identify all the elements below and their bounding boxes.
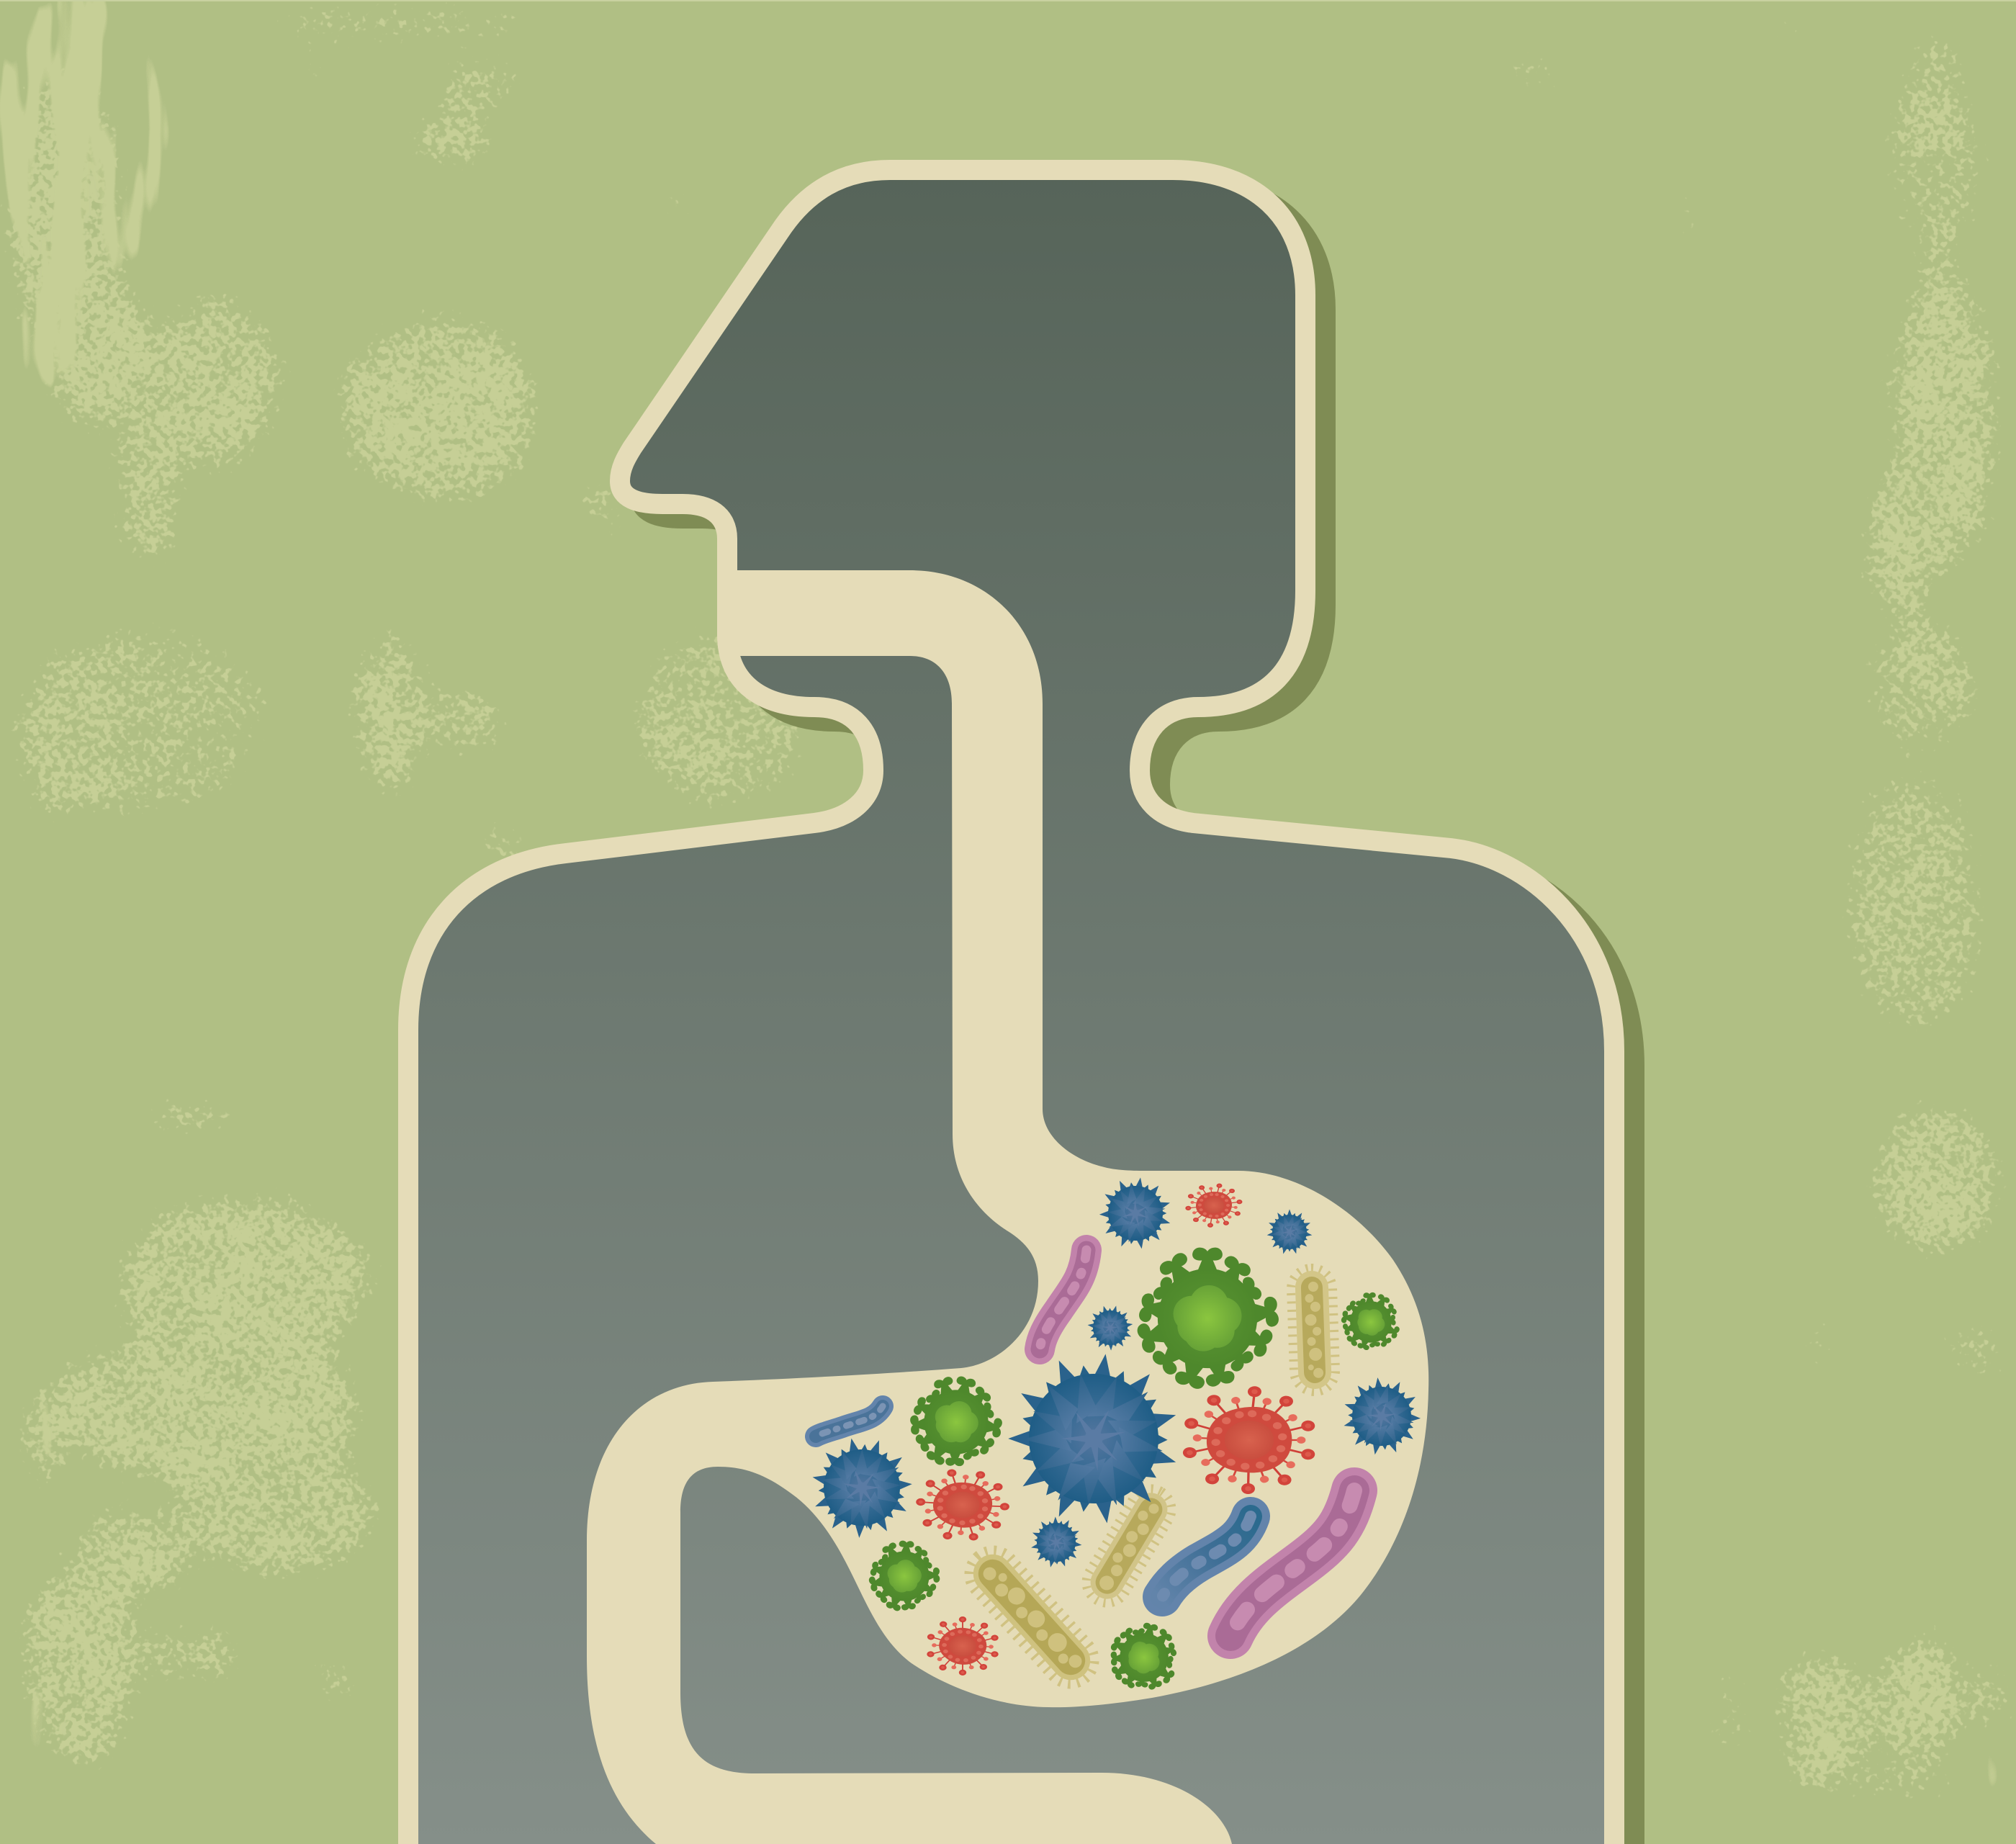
blue virus, top bbox=[1084, 1162, 1187, 1264]
body drop shadow bbox=[428, 184, 1634, 1844]
blue virus, lower bbox=[1021, 1507, 1092, 1578]
green virus, left bbox=[897, 1363, 1016, 1482]
digestive tract: mouth, esophagus, stomach, intestine bbox=[587, 570, 1428, 1844]
microbes in the stomach bbox=[797, 1162, 1435, 1707]
blue virus, right bbox=[1328, 1363, 1435, 1470]
blue virus, left bbox=[797, 1423, 927, 1552]
red virus, bottom bbox=[910, 1604, 1015, 1688]
blue bacterium, small bbox=[816, 1406, 883, 1436]
green virus, right bbox=[1329, 1280, 1413, 1364]
yellow bacterium, centre bbox=[1079, 1481, 1179, 1611]
human body silhouette bbox=[408, 170, 1614, 1844]
red virus, left bbox=[901, 1456, 1025, 1554]
blue virus, middle bbox=[1082, 1300, 1138, 1356]
blue bacterium, large bbox=[1162, 1516, 1251, 1597]
green virus, lower left bbox=[863, 1534, 946, 1618]
yellow bacterium, lower bbox=[960, 1541, 1104, 1694]
top edge highlight bbox=[0, 0, 2016, 1]
blue virus, large bbox=[996, 1342, 1191, 1534]
red virus, large bbox=[1176, 1382, 1323, 1499]
yellow bacterium, right bbox=[1290, 1267, 1336, 1393]
blue virus, top right bbox=[1266, 1209, 1313, 1254]
red virus, top bbox=[1180, 1179, 1248, 1232]
pink bacterium, small bbox=[1040, 1250, 1086, 1349]
green virus, large bbox=[1130, 1239, 1287, 1398]
pink bacterium, large bbox=[1230, 1490, 1354, 1636]
green virus, bottom bbox=[1094, 1609, 1194, 1707]
